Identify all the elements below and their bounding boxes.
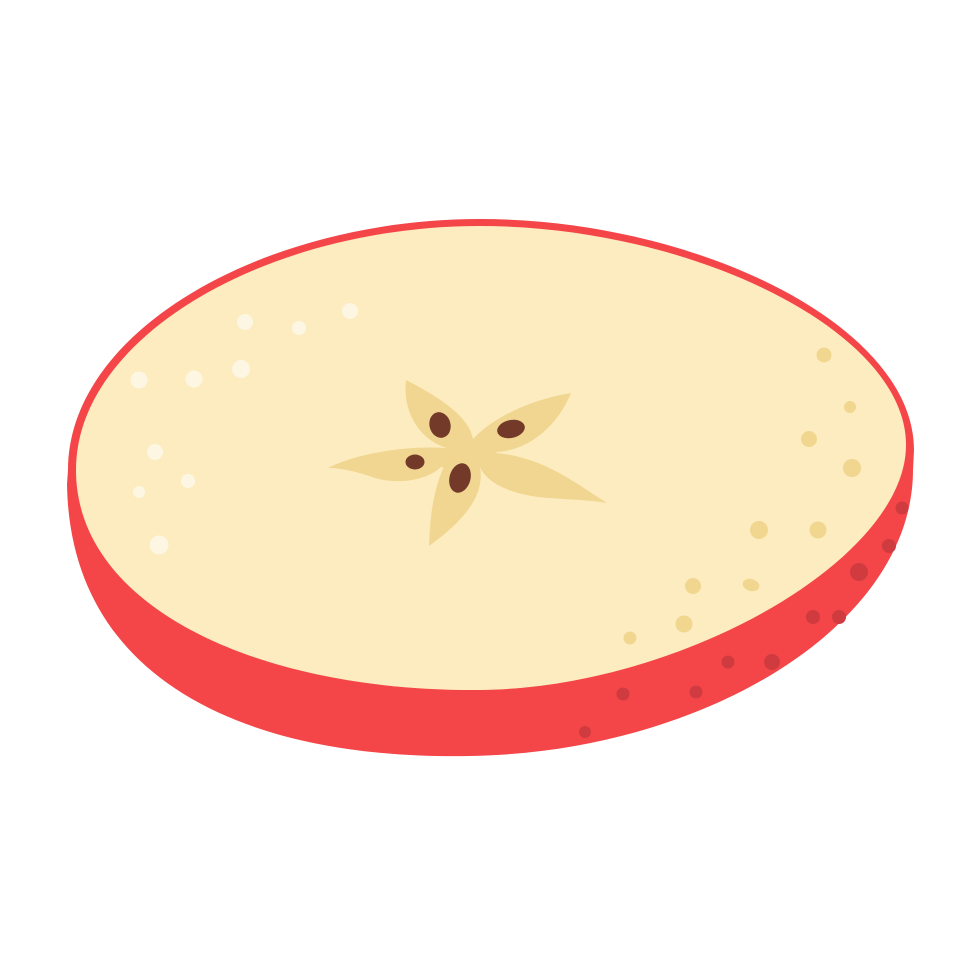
apple seeds (406, 410, 527, 495)
white flesh speckles (130, 303, 358, 554)
petal: lower right (478, 452, 607, 503)
petal: upper left (406, 380, 480, 450)
dark red skin speckles (579, 502, 908, 738)
petal: left (328, 448, 462, 481)
petal: upper right (470, 393, 571, 452)
core centre (441, 439, 497, 472)
golden flesh speckles (624, 348, 861, 644)
red apple skin (67, 219, 914, 756)
cream apple flesh (76, 226, 906, 690)
petal: bottom (429, 455, 481, 546)
apple core star (328, 380, 607, 546)
